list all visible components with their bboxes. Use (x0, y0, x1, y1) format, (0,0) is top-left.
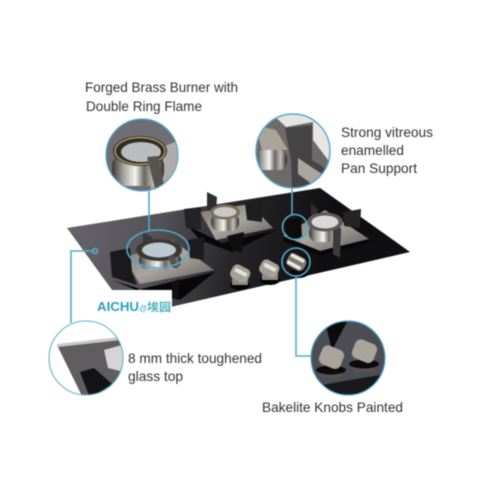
callout: burner connector (127, 191, 189, 268)
label: burner: Forged Brass Burner with (85, 79, 238, 95)
label: glass top: glass top (128, 368, 183, 384)
label: glass top (128, 350, 262, 384)
label: pan support (341, 124, 433, 176)
knobs (228, 252, 308, 290)
zoom circle: forged brass burner (106, 119, 180, 195)
label: pan support: Pan Support (341, 160, 417, 176)
callout: glass connector (71, 248, 98, 323)
zoom circle: glass top (49, 321, 124, 398)
callout: pan support connector (282, 188, 308, 240)
label: burner: Double Ring Flame (86, 98, 202, 114)
burner: middle (184, 192, 276, 252)
callout: knob connector (282, 248, 312, 356)
burner: right (283, 203, 369, 258)
infographic: gas hob features (48, 81, 434, 413)
zoom circle: pan support (255, 112, 331, 190)
glass cooktop (67, 188, 410, 316)
label: knobs: Bakelite Knobs Painted (262, 399, 403, 415)
watermark: AICHU logo: 埃园 (147, 300, 171, 314)
label: burner (85, 79, 238, 114)
zoom circle: bakelite knobs (311, 321, 385, 396)
watermark: AICHU logo (80, 290, 172, 320)
label: glass top: 8 mm thick toughened (128, 350, 262, 366)
burner: left (110, 232, 215, 300)
watermark: AICHU logo: AICHU (97, 299, 139, 314)
watermark: AICHU logo: @ (139, 304, 147, 313)
label: pan support: Strong vitreous (341, 124, 433, 140)
label: pan support: enamelled (341, 142, 404, 158)
